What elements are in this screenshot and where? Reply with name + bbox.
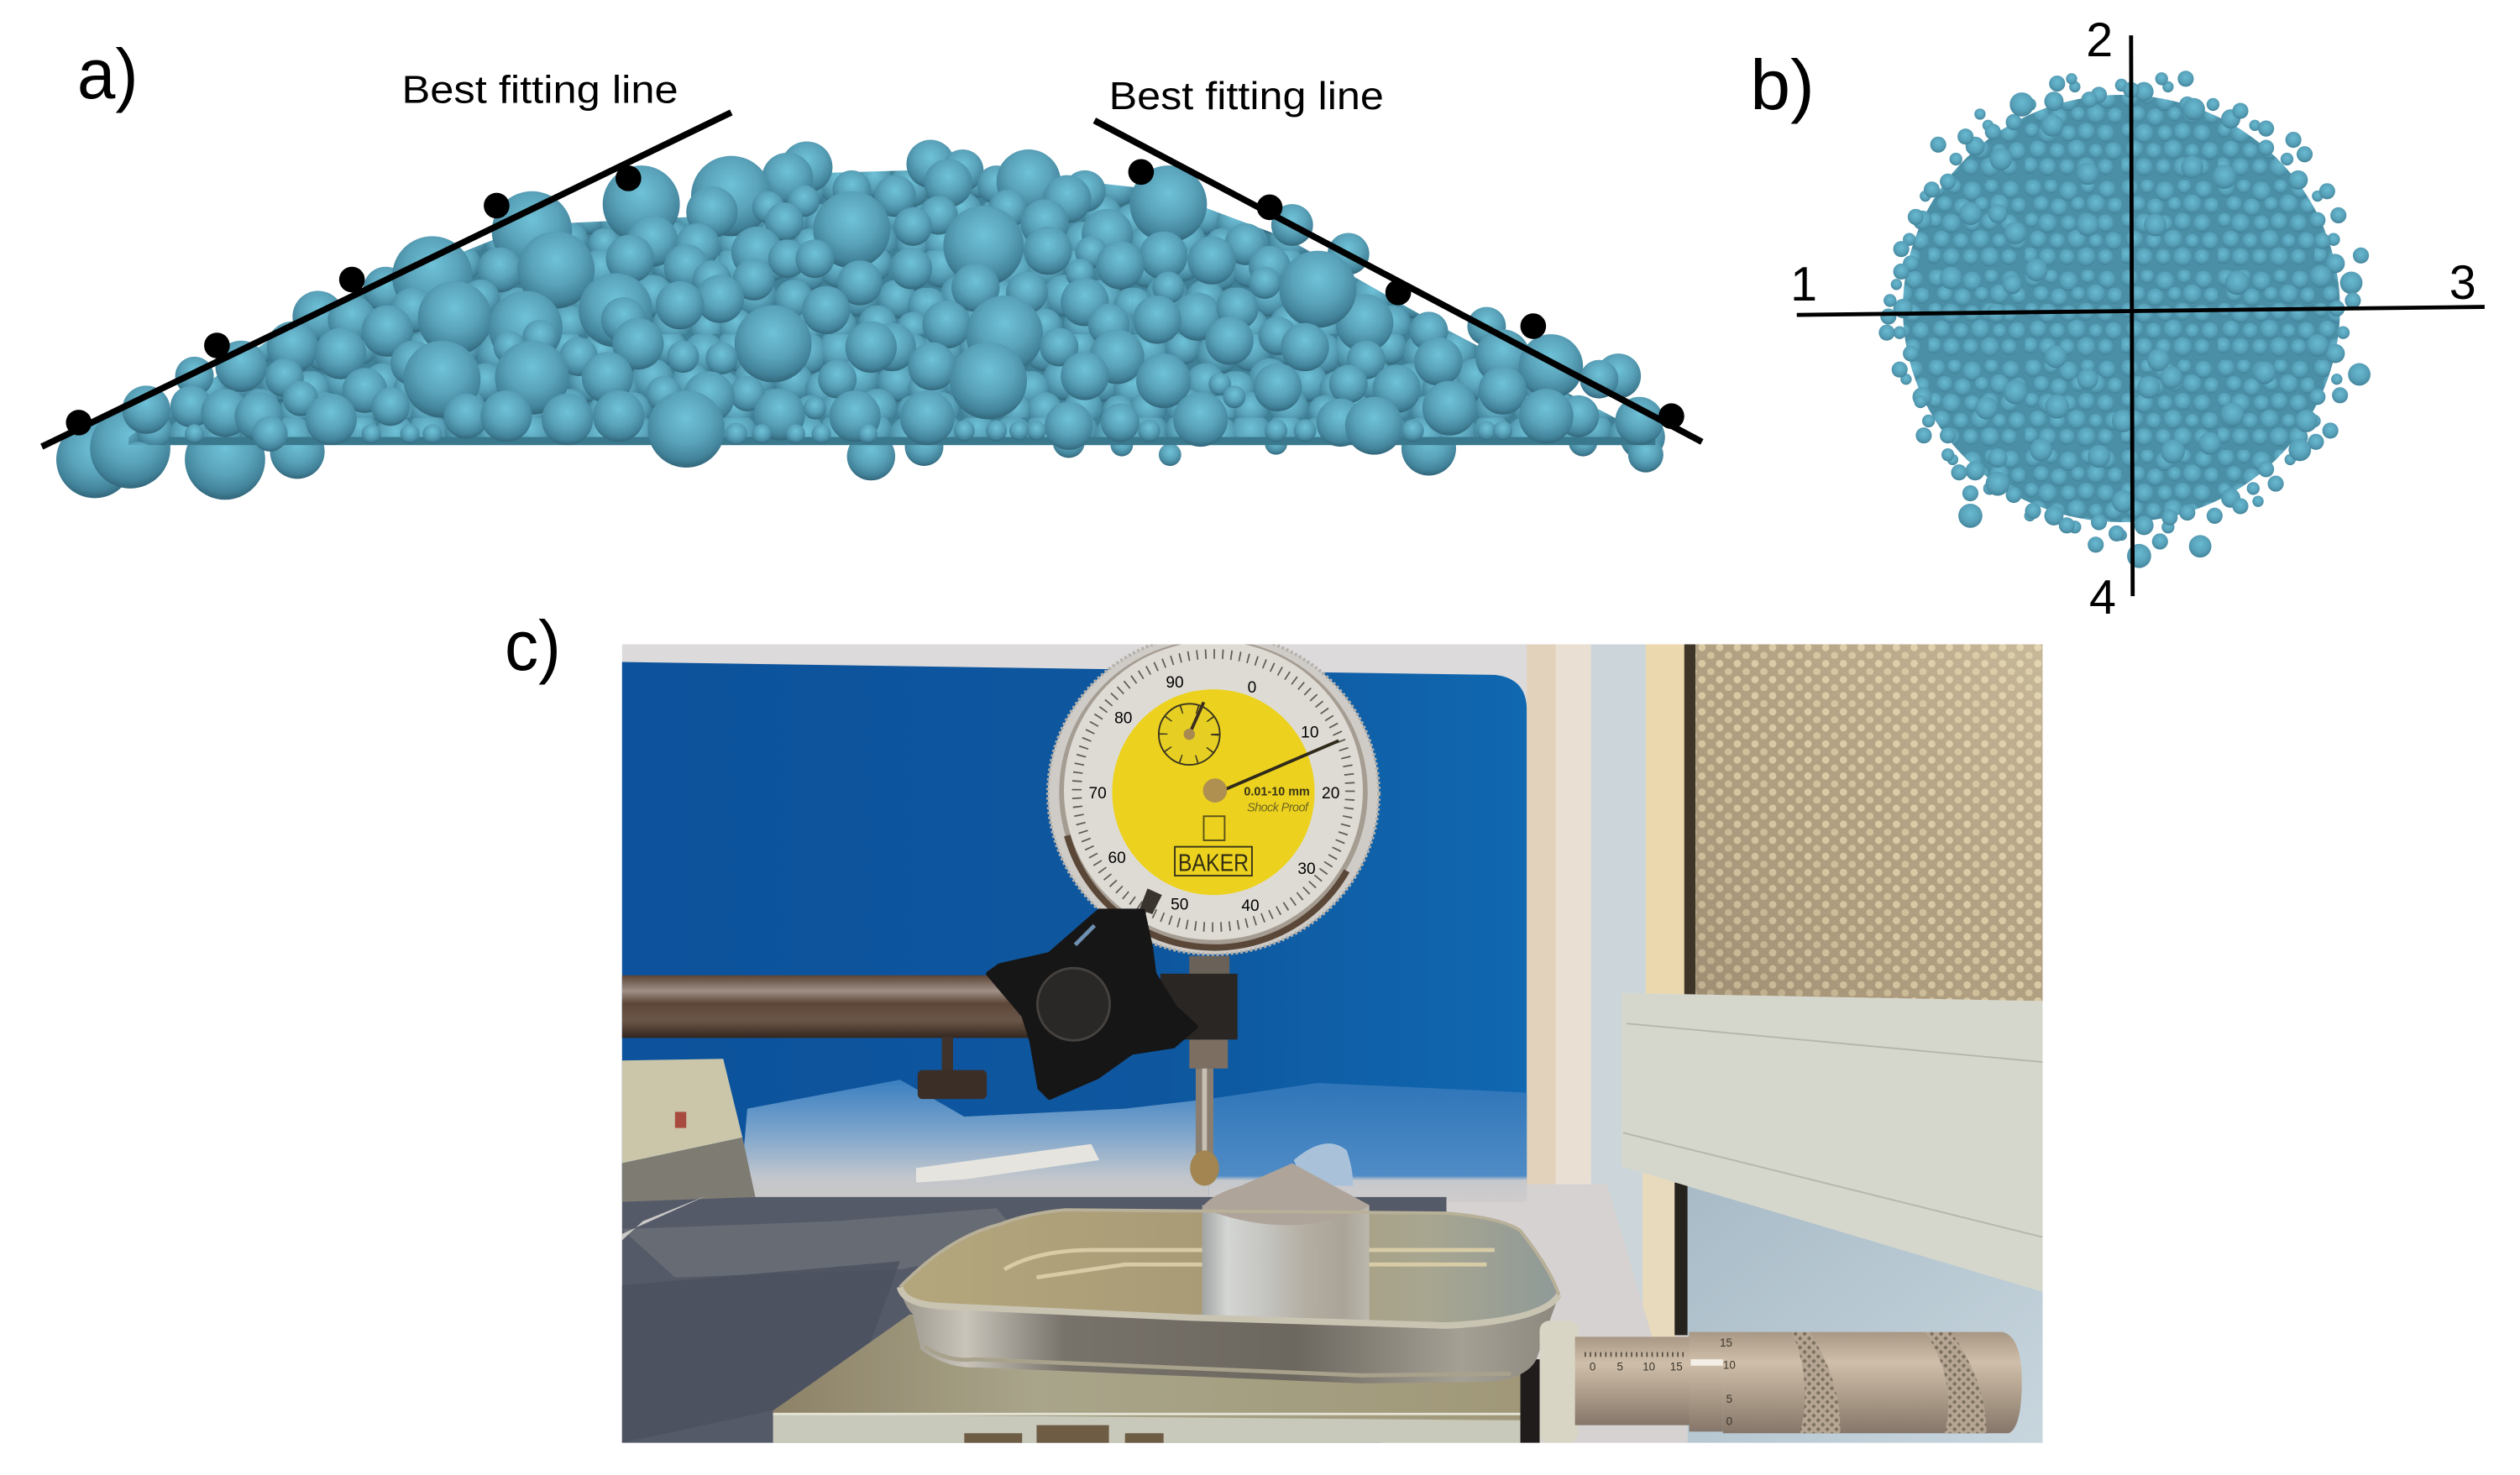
shock proof label: Shock Proof — [1247, 802, 1310, 815]
right best fitting line — [1094, 121, 1702, 442]
yellow dial — [1112, 689, 1315, 895]
translucent plastic sheet, left — [739, 1080, 1208, 1202]
dial scale numbers: 70 — [1089, 785, 1107, 803]
tray interior shine — [1004, 1250, 1495, 1278]
dial scale numbers: 20 — [1322, 785, 1339, 803]
knurled ring 1 — [1792, 1332, 1841, 1433]
needle — [1215, 740, 1339, 793]
probe stem and tip — [1189, 956, 1229, 1185]
tray interior — [900, 1210, 1559, 1326]
bezel pointer — [1140, 888, 1162, 914]
bench dark area — [622, 1261, 900, 1443]
panel b: top view of particle pile with measurement axes — [1750, 13, 2485, 625]
dial scale numbers: 40 — [1241, 897, 1260, 915]
gauge inner ring — [1059, 640, 1368, 944]
thumb screw — [918, 1036, 987, 1099]
dial scale numbers: 30 — [1297, 860, 1316, 878]
sleeve graduation marks — [1585, 1353, 1688, 1356]
dial scale numbers: 0 — [1248, 679, 1256, 697]
tray back rim — [900, 1210, 1559, 1295]
sleeve numbers — [1590, 1361, 1683, 1373]
heading: b): b) — [1750, 45, 1815, 124]
thimble numbers: 10 — [1723, 1359, 1736, 1372]
dark ring lower left — [1067, 835, 1347, 948]
textured glass panel — [1695, 644, 2043, 1001]
dark slit beneath frame — [1674, 1183, 1688, 1335]
irregular edge of the disc — [1891, 79, 2352, 541]
sample cylinder — [1202, 1164, 1370, 1321]
blue board — [622, 662, 1527, 1197]
label: left best fitting line: Best fitting line — [401, 68, 678, 112]
axis label 4: 4 — [2089, 571, 2116, 625]
beige instrument on left — [622, 1059, 756, 1241]
axis label 1: 1 — [1790, 258, 1817, 311]
logo mark — [1204, 816, 1224, 840]
grey window frame — [1621, 993, 2043, 1292]
bench surface right — [1446, 1184, 1688, 1443]
gauge bezel — [1048, 633, 1379, 955]
cream window post — [1646, 644, 1688, 1001]
bench mottling — [622, 1208, 1029, 1278]
panel c: photograph of dial gauge measuring a sample — [622, 633, 2043, 1443]
axis label 2: 2 — [2086, 13, 2113, 67]
plastic sheet highlight — [916, 1144, 1099, 1183]
dark gap beside stand — [1521, 1359, 1540, 1443]
measured surface points — [65, 159, 1684, 436]
left best fitting line — [42, 112, 731, 447]
lower light blue wall — [1688, 1173, 2043, 1443]
micrometer head — [1575, 1332, 2022, 1433]
packed particle disc — [1903, 95, 2340, 522]
range label: 0.01-10 mm — [1244, 785, 1310, 798]
tray front rim — [900, 1287, 1559, 1326]
dial scale numbers: 10 — [1301, 724, 1318, 741]
spheres protruding below the base — [56, 408, 1665, 500]
conical particle heap on cylinder — [1202, 1164, 1370, 1225]
plastic fold behind heap — [1294, 1143, 1354, 1185]
panel a: side view of simulated particle pile — [42, 34, 1702, 500]
sleeve numbers: 10 — [1642, 1361, 1655, 1373]
heading: c): c) — [505, 606, 561, 685]
hub — [1203, 778, 1227, 803]
brand box — [1175, 847, 1252, 876]
dial scale numbers: 80 — [1114, 709, 1132, 727]
vertical axis — [2131, 35, 2133, 596]
wall behind — [621, 645, 1688, 1336]
gauge ticks — [1077, 654, 1350, 927]
sleeve numbers: 0 — [1590, 1361, 1595, 1373]
thimble numbers: 15 — [1720, 1336, 1732, 1349]
thimble numbers: 5 — [1726, 1393, 1732, 1405]
larger particles within the disc — [1940, 114, 2332, 513]
tray wall — [904, 1298, 1556, 1383]
particles in the pile — [122, 140, 1663, 468]
tray — [900, 1210, 1559, 1383]
thimble numbers: 0 — [1726, 1415, 1732, 1428]
outlying particles — [1878, 71, 2371, 568]
gauge face — [1064, 641, 1363, 940]
flat base of the pile — [169, 437, 1655, 445]
dark gap next to glass — [1684, 644, 1695, 995]
heading: a): a) — [77, 34, 139, 113]
translucent plastic sheet, right — [1208, 1083, 1527, 1202]
dial scale numbers — [1089, 674, 1339, 915]
sub-dial — [1159, 702, 1220, 765]
clamp block — [1160, 974, 1238, 1039]
sleeve numbers: 5 — [1616, 1361, 1623, 1373]
micrometer support — [1540, 1321, 1578, 1443]
tray bottom lip — [924, 1347, 1511, 1375]
dial scale numbers: 60 — [1108, 850, 1126, 867]
door frame light strip — [1591, 644, 1649, 1319]
cream wall strip — [1527, 644, 1556, 1199]
thimble highlight — [1690, 1359, 1723, 1366]
row of small particles along the base — [185, 420, 1512, 445]
metal stand base — [773, 1315, 1521, 1443]
label: right best fitting line: Best fitting line — [1109, 74, 1384, 118]
brand name: BAKER — [1178, 850, 1249, 876]
dial gauge — [1048, 633, 1379, 955]
horizontal rod — [622, 975, 1056, 1038]
sleeve numbers: 15 — [1670, 1361, 1683, 1373]
dial scale numbers: 50 — [1171, 896, 1188, 913]
dark bench — [622, 1197, 1447, 1443]
pale wall strip — [1556, 644, 1591, 1199]
black star knob — [988, 911, 1196, 1097]
post beneath frame — [1642, 1165, 1676, 1342]
thimble numbers — [1720, 1336, 1736, 1428]
axis label 3: 3 — [2449, 256, 2476, 310]
dial scale numbers: 90 — [1166, 674, 1184, 692]
pile body — [128, 169, 1639, 445]
knurled ring 2 — [1925, 1332, 1987, 1433]
horizontal axis — [1797, 307, 2485, 315]
